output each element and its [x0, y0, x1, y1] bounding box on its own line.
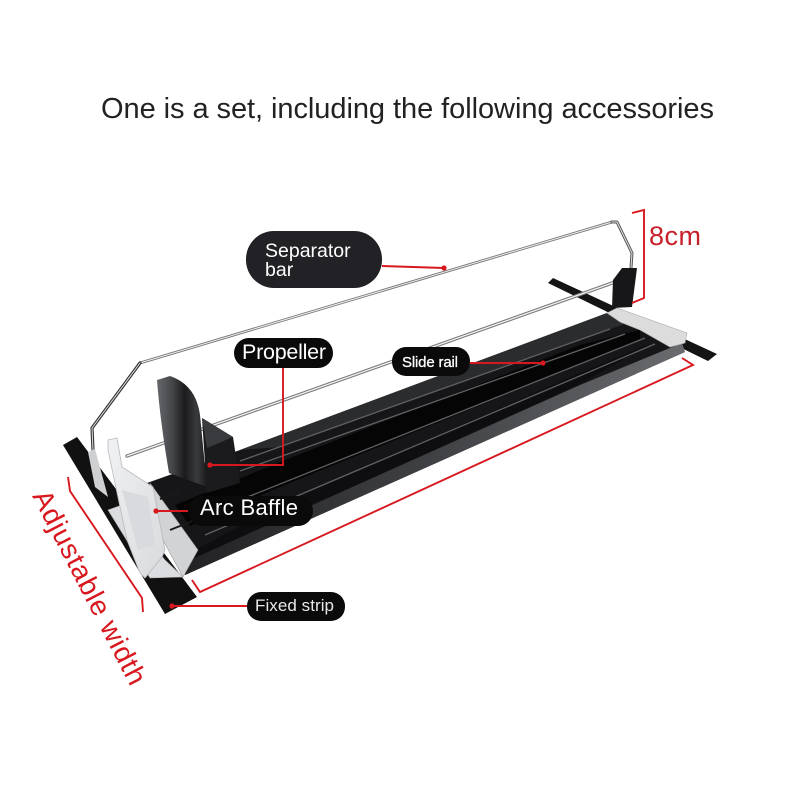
- front clear stopper: [108, 483, 198, 578]
- label: separator bar: [246, 231, 382, 288]
- title: One is a set, including the following accessories: [101, 93, 714, 125]
- label: propeller: Propeller: [242, 340, 326, 364]
- label: arc baffle: Arc Baffle: [200, 495, 298, 520]
- label: separator bar: bar: [265, 259, 294, 281]
- red annotation lines: [68, 210, 693, 612]
- separator bar wire: [92, 222, 632, 456]
- front fixed strip: [63, 437, 197, 614]
- label: slide rail: Slide rail: [402, 354, 458, 371]
- back clear stopper: [607, 308, 687, 347]
- label: propeller: [234, 338, 333, 368]
- label: fixed strip: [247, 592, 345, 621]
- label: arc baffle: [188, 495, 313, 526]
- slide rail: [147, 313, 685, 575]
- dimension: adjustable width: Adjustable width: [27, 485, 153, 690]
- label: slide rail: [392, 347, 470, 376]
- dimension: 8cm: 8cm: [649, 221, 701, 251]
- back post: [612, 268, 637, 308]
- back fixed strip: [548, 278, 717, 361]
- arc baffle: [88, 438, 165, 578]
- propeller: [157, 376, 240, 493]
- label: separator bar: Separator: [265, 240, 351, 262]
- label: fixed strip: Fixed strip: [255, 596, 334, 615]
